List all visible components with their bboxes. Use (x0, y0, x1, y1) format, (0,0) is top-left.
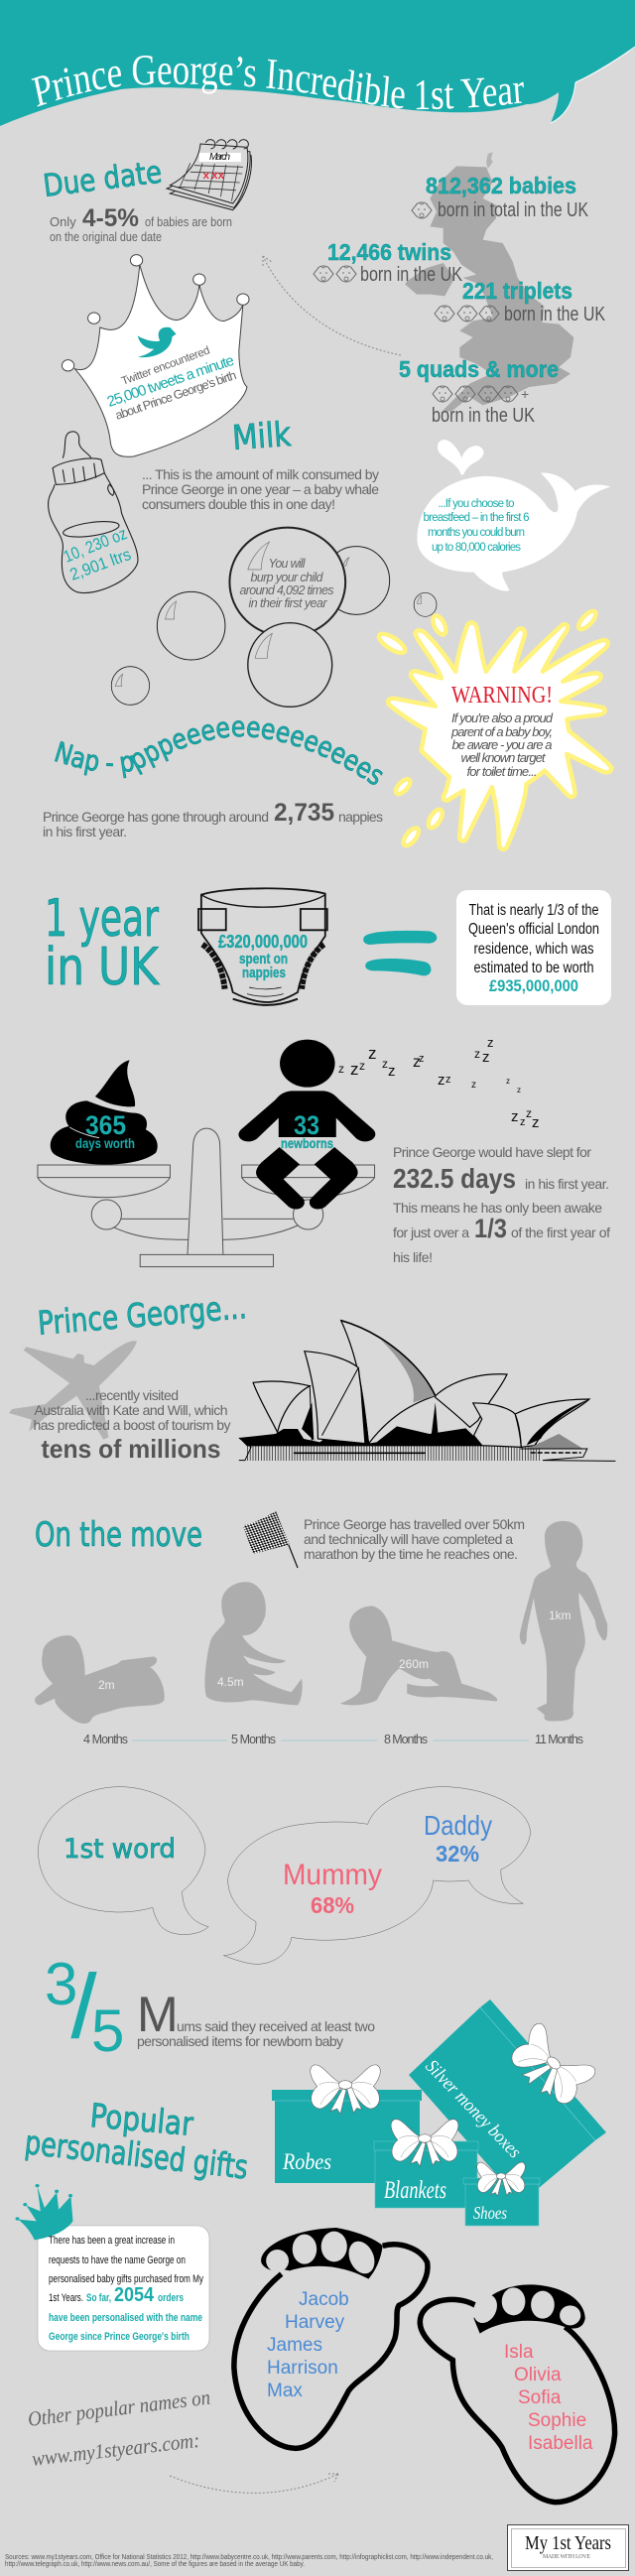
icon: nappy (198, 888, 327, 1005)
icon: balance scale (38, 1128, 375, 1267)
sleep text: 232.5 days (393, 1163, 516, 1194)
speech bubble: mummy and daddy (223, 1787, 531, 1964)
boy footprint (234, 2228, 428, 2448)
timeline (83, 1733, 583, 1746)
bottle amount (61, 524, 134, 584)
boy footprint: Max (267, 2381, 303, 2401)
heading: popular gifts: Popular (88, 2096, 195, 2143)
baby label (281, 1110, 333, 1151)
baby label: 33 (294, 1110, 319, 1140)
sleeping z's: z (382, 1057, 388, 1071)
callout text: 2054 (114, 2284, 155, 2306)
icon: plane (9, 1341, 137, 1440)
icon: baby bottle (49, 432, 138, 593)
sources: http://www.telegraph.co.uk, http://www.news.com.au/, Some of the figures are based in the average UK baby. (5, 2561, 305, 2568)
callout text: 1st Years. (49, 2292, 83, 2304)
handwritten note (27, 2385, 211, 2471)
boy footprint: James (267, 2335, 322, 2356)
fraction 3/5: 3 (45, 1951, 77, 2017)
whale text: months you could burn (428, 527, 525, 539)
warning text (450, 710, 554, 779)
sleeping z's: z (506, 1077, 510, 1086)
sleeping z's: z (338, 1062, 344, 1076)
panel: popular personalised gifts (23, 1999, 606, 2226)
poo label: days worth (75, 1135, 135, 1151)
callout: queen's residence (456, 890, 611, 1005)
heading: on the move: On the move (35, 1515, 202, 1555)
heading: nappies: Nap - ppppeeeeeeeeeeeeees (55, 720, 383, 785)
stat: twins (314, 239, 463, 286)
milk text: Prince George in one year – a baby whale (142, 481, 379, 497)
sleeping z's: z (350, 1060, 359, 1079)
milk text (142, 466, 379, 512)
girl footprint: Isla (504, 2342, 534, 2363)
gift: shoes: Shoes (473, 2203, 507, 2223)
girl footprint (420, 2284, 615, 2503)
map of UK (405, 152, 573, 414)
panel: warning splash (375, 609, 611, 849)
gift: shoes (463, 2162, 540, 2226)
sleeping z's: z (359, 1059, 365, 1073)
sleep text: his life! (393, 1249, 433, 1265)
callout: queen's residence: estimated to be worth (474, 960, 593, 976)
sleep text: of the first year of (511, 1224, 610, 1240)
australia text: tens of millions (42, 1434, 220, 1464)
stat: 4-5%: 4-5% (82, 204, 139, 232)
stat: twins: 12,466 twins (327, 239, 451, 265)
callout text: requests to have the name George on (49, 2254, 186, 2266)
sleeping z's: z (526, 1106, 532, 1120)
gift: blankets (374, 2120, 478, 2208)
panel: George name orders (16, 2184, 209, 2351)
panel: UK births map (263, 152, 606, 427)
gift: blankets: Blankets (384, 2177, 446, 2204)
sleeping z's: z (445, 1074, 450, 1086)
panel: first word (38, 1787, 531, 1964)
panel: scales (38, 1035, 610, 1267)
milk text: ... This is the amount of milk consumed by (142, 466, 379, 482)
travel text: and technically will have completed a (304, 1531, 513, 1547)
speech bubble: mummy and daddy: Daddy (424, 1810, 492, 1841)
stat: quads: + (521, 386, 529, 402)
baby silhouette: 11 months: 1km (549, 1609, 572, 1622)
sleeping z's: z (413, 1054, 421, 1071)
nappy stat text: nappies (338, 809, 383, 825)
nappy amount: nappies (242, 965, 286, 981)
mums text: M (137, 1987, 179, 2042)
burp text: You will (268, 557, 307, 571)
travel text: marathon by the time he reaches one. (304, 1546, 518, 1562)
travel text (304, 1516, 525, 1562)
sleeping z's: z (517, 1086, 521, 1095)
icon: teal crown (16, 2184, 72, 2240)
stat: triplets: born in the UK (504, 304, 606, 325)
girl footprint: Sofia (518, 2387, 562, 2408)
sleeping z's: z (438, 1072, 444, 1089)
gift: robes: Robes (282, 2149, 331, 2174)
burp text: burp your child (250, 571, 324, 584)
poo label (75, 1110, 135, 1151)
girl footprint: Isabella (528, 2433, 593, 2454)
bottle amount: 10, 230 oz (61, 524, 130, 567)
warning text: If you're also a proud (451, 710, 554, 725)
mums text (137, 1987, 375, 2049)
sleeping z's (338, 1035, 540, 1131)
gift: silver money boxes (409, 1999, 606, 2208)
speech bubble: mummy and daddy: 32% (436, 1841, 479, 1867)
icon: poo (51, 1060, 158, 1165)
speech bubble: 1st word: 1st word (64, 1834, 176, 1865)
title: Prince George’s Incredible 1st Year (32, 56, 524, 109)
whale text: ...If you choose to (439, 498, 514, 510)
warning heading: WARNING! (451, 683, 553, 708)
sleep text: 1/3 (474, 1214, 507, 1243)
stat: quads: 5 quads & more (399, 356, 559, 382)
dashed arrow (263, 256, 401, 355)
timeline: 5 Months (231, 1733, 276, 1746)
nappy amount (218, 932, 308, 981)
callout text: There has been a great increase in (49, 2235, 175, 2247)
callout: queen's residence: That is nearly 1/3 of the (468, 902, 599, 919)
boy footprint: Harvey (285, 2312, 345, 2333)
crown shape (62, 255, 249, 456)
callout: queen's residence: £935,000,000 (489, 976, 578, 995)
panel: due date (42, 140, 251, 244)
baby silhouette: 4 months: 2m (98, 1678, 115, 1692)
australia text (34, 1387, 230, 1464)
sources (5, 2554, 493, 2568)
baby silhouette: 8 months: 260m (399, 1657, 429, 1671)
callout text: George since Prince George's birth (49, 2331, 190, 2343)
callout text: orders (158, 2292, 184, 2304)
burp text: in their first year (248, 596, 327, 610)
icon: whale (417, 440, 611, 591)
stat: 4-5%: on the original due date (50, 230, 162, 244)
calendar month: March (209, 152, 230, 163)
girl footprint: Olivia (514, 2365, 562, 2385)
handwritten note: Other popular names on (27, 2385, 211, 2431)
heading: popular gifts (23, 2096, 250, 2187)
burp text (240, 557, 333, 610)
panel: whale callout (417, 440, 611, 591)
nappy stat text (43, 799, 383, 839)
sleep text: Prince George would have slept for (393, 1144, 591, 1160)
speech bubble: 1st word (38, 1787, 208, 1935)
panel: milk (49, 415, 379, 593)
crown text: about Prince George's birth (113, 368, 238, 423)
poo label: 365 (85, 1110, 126, 1140)
logo: My 1st Years (525, 2532, 611, 2554)
stat: babies (412, 173, 589, 221)
sources: Sources: www.my1styears.com, Office for National Statistics 2012, http://www.babycentre.co.uk, http://www.parents.com, http://infographiclist.com, http://www.independent.co.uk, (5, 2554, 493, 2561)
mums text: ums said they received at least two (177, 2018, 375, 2034)
warning text: well known target (460, 750, 547, 765)
gift: robes (272, 2065, 422, 2183)
heading: Prince George: Prince George... (37, 1287, 248, 1343)
boy footprint: Jacob (299, 2289, 349, 2310)
stat: quads (399, 356, 559, 427)
travel text: Prince George has travelled over 50km (304, 1516, 525, 1532)
stat: 4-5%: Only (50, 214, 76, 229)
baby silhouette: 8 months (340, 1606, 497, 1705)
fraction 3/5 (45, 1951, 124, 2064)
mums text: personalised items for newborn baby (137, 2033, 343, 2049)
whale text: breastfeed – in the first 6 (423, 512, 530, 524)
sleeping z's: z (474, 1047, 480, 1061)
fraction 3/5: / (71, 1958, 96, 2057)
heading: milk: Milk (231, 415, 293, 458)
sleep text: in his first year. (525, 1176, 609, 1192)
sleeping z's: z (482, 1049, 490, 1066)
callout text: personalised baby gifts purchased from My (49, 2273, 203, 2285)
nappy stat text: Prince George has gone through around (43, 809, 269, 825)
panel: Prince George in Australia (9, 1287, 615, 1464)
sleeping z's: z (388, 1063, 395, 1080)
callout: queen's residence: Queen's official London (468, 921, 599, 938)
bubbles (111, 528, 437, 707)
panel: 1 year in UK (45, 888, 611, 1005)
timeline: 4 Months (83, 1733, 128, 1746)
warning text: for toilet time... (466, 764, 538, 779)
panel: 3/5 mums (45, 1951, 375, 2064)
panel: burp bubbles (111, 528, 437, 707)
sleeping z's: z (471, 1080, 476, 1091)
warning text: be aware - you are a (452, 737, 552, 752)
callout text: have been personalised with the name (49, 2312, 202, 2324)
baby label: newborns (281, 1135, 333, 1151)
stat: 4-5% (50, 204, 232, 244)
baby silhouette: 11 months (520, 1521, 607, 1721)
baby silhouette: 5 months (204, 1582, 303, 1705)
handwritten note: www.my1styears.com: (31, 2428, 200, 2471)
icon: sydney opera house (239, 1321, 615, 1461)
heading: popular gifts: personalised gifts (23, 2123, 250, 2187)
banner: title ribbon (0, 0, 635, 126)
stat: triplets (435, 278, 606, 325)
stat: quads: born in the UK (432, 405, 536, 427)
fraction 3/5: 5 (91, 1997, 124, 2064)
heading: 1 year in UK: 1 year (45, 889, 159, 949)
sleep text (393, 1144, 610, 1265)
heading: 1 year in UK: in UK (45, 938, 161, 997)
heading: 1 year in UK (45, 889, 161, 997)
sleep text: This means he has only been awake (393, 1200, 602, 1216)
callout text (49, 2235, 203, 2343)
callout text: So far, (86, 2292, 111, 2304)
nappy amount: £320,000,000 (218, 932, 308, 952)
sleeping z's: z (511, 1108, 518, 1125)
equals sign (363, 931, 437, 975)
panel: other popular names (27, 2228, 615, 2503)
speech bubble: mummy and daddy: Mummy (283, 1859, 382, 1891)
timeline: 11 Months (535, 1733, 583, 1746)
milk text: consumers double this in one day! (142, 496, 335, 512)
stat: babies: born in total in the UK (438, 199, 589, 221)
nappy stat text: 2,735 (274, 799, 334, 827)
crown text: Twitter encountered (120, 344, 211, 388)
logo: MADE WITH LOVE (543, 2554, 590, 2560)
icon: checkered flag (243, 1511, 298, 1568)
logo (508, 2524, 629, 2570)
nappy amount: spent on (239, 951, 288, 967)
dashed arrow (170, 2474, 338, 2493)
callout box (38, 2226, 209, 2351)
stat: babies: 812,362 babies (426, 173, 576, 198)
stat: twins: born in the UK (360, 264, 463, 286)
australia text: ...recently visited (85, 1387, 179, 1403)
timeline: 8 Months (384, 1733, 428, 1746)
stat: 4-5%: of babies are born (145, 215, 232, 229)
panel: twitter crown (62, 255, 249, 456)
callout: queen's residence: residence, which was (474, 941, 594, 958)
whale text: up to 80,000 calories (432, 542, 521, 554)
sleeping z's: z (419, 1053, 425, 1065)
sleeping z's: z (520, 1116, 526, 1128)
nappy stat text: in his first year. (43, 824, 127, 839)
stat: triplets: 221 triplets (462, 278, 572, 304)
sleeping z's: z (368, 1044, 377, 1063)
whale text (423, 498, 530, 554)
sleeping z's: z (532, 1114, 540, 1131)
girl footprint: Sophie (528, 2410, 586, 2431)
baby silhouette: 4 months (35, 1635, 165, 1724)
australia text: has predicted a boost of tourism by (34, 1417, 230, 1433)
boy footprint: Harrison (267, 2358, 338, 2379)
heading: due date: Due date (42, 155, 164, 204)
bottle amount: 2,901 ltrs (67, 545, 134, 584)
sleep text: for just over a (393, 1224, 469, 1240)
icon: twitter bird (138, 327, 177, 357)
gift: silver money boxes: Silver money boxes (421, 2056, 525, 2162)
crown text: 25,000 tweets a minute (105, 352, 236, 411)
panel: nappies count (43, 720, 383, 839)
icon: sitting baby (238, 1040, 375, 1209)
warning text: parent of a baby boy, (450, 724, 553, 739)
sleeping z's: z (487, 1035, 494, 1050)
icon: splash (375, 609, 611, 849)
speech bubble: mummy and daddy: 68% (311, 1892, 354, 1918)
australia text: Australia with Kate and Will, which (34, 1402, 228, 1418)
panel: on the move (35, 1511, 607, 1746)
burp text: around 4,092 times (240, 583, 333, 597)
icon: calendar (167, 140, 251, 210)
baby silhouette: 5 months: 4.5m (217, 1675, 244, 1689)
